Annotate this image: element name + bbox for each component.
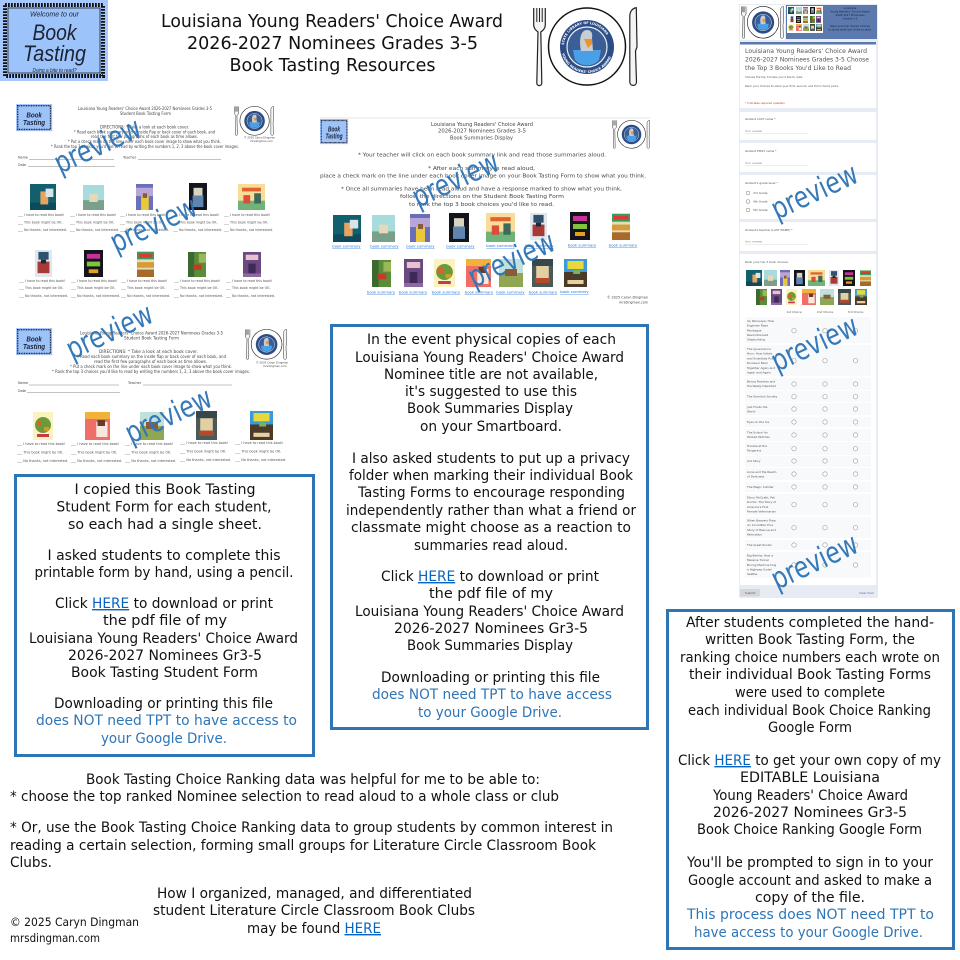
text box: summaries display instructions: Book Summaries Display: [407, 401, 573, 417]
icon: plate with fork, knife and award seal: STATE LIBRARY OF LOUISIANA: [562, 22, 608, 45]
submit button and clear form: [740, 589, 874, 596]
watermark: preview stamps: preview: [105, 190, 203, 260]
grid row labels: and Scientists Put a: [747, 356, 776, 360]
response lines row 1: ___ This book might be OK.: [172, 220, 218, 224]
text box: summaries display instructions: Louisiana Young Readers' Choice Award: [355, 350, 624, 366]
text box: google form instructions: After students completed the hand-: [686, 615, 934, 631]
logo: small book tasting sign: Book: [26, 334, 42, 343]
text box: summaries display instructions: Louisiana Young Readers' Choice Award: [355, 604, 624, 620]
logo: small book tasting sign: Tasting: [23, 118, 45, 127]
icon: plate: [245, 329, 287, 359]
watermark: preview stamps: preview: [120, 381, 218, 451]
logo: small book tasting sign: [320, 119, 348, 144]
text box: student form instructions: the pdf file of my: [103, 613, 227, 629]
text box: summaries display instructions: Click HERE to download or print: [381, 569, 599, 585]
watermark: preview stamps: preview: [49, 111, 147, 181]
grid row labels: Relocation: [747, 532, 762, 536]
grid row labels: Wicked Witches: [747, 435, 770, 439]
question: teacher: student's teacher (LAST NAME) *: [745, 228, 793, 232]
response lines row 2: [18, 279, 275, 298]
text block: ranking data uses: * Or, use the Book Tasting Choice Ranking data to group students by common interest in: [10, 820, 613, 836]
text box: summaries display instructions: Downloading or printing this file: [381, 670, 600, 686]
book covers: [33, 411, 273, 440]
directions text: Date: [18, 389, 26, 393]
response lines row 2: ___ No thanks, not interested.: [173, 294, 223, 298]
book covers row 1 with links: book summary: [370, 244, 399, 248]
copyright: [10, 915, 139, 945]
grid row labels: of Darkness: [747, 474, 765, 478]
grid radio buttons: [792, 328, 858, 567]
question: grade level: student's grade level *: [745, 181, 778, 185]
display instructions: Louisiana Young Readers' Choice Award: [431, 122, 533, 128]
text block: literature circle link: [153, 886, 475, 937]
directions text: * Put a check mark on the line under each book cover image to show what you think.: [68, 139, 221, 144]
panel: student book tasting form page 1 preview: [16, 104, 275, 298]
text box: google form instructions: 2026-2027 Nominees Gr3-5: [713, 805, 907, 821]
grid rows background: [745, 317, 871, 578]
display instructions: follow the directions on the Student Book Tasting Form: [400, 194, 564, 200]
directions text: DIRECTIONS: * Take a look at each book cover.: [100, 124, 189, 130]
book covers row 2 with links: book summary: [432, 290, 461, 294]
grid row labels: When Beavers Flew:: [747, 518, 776, 522]
book covers row 1 with links: book summary: [609, 242, 638, 248]
response lines: ___ This book might be OK.: [124, 450, 171, 454]
response lines: ___ I have to read this book!: [179, 441, 228, 445]
grid row labels: Montague: [747, 328, 762, 332]
text box: google form instructions: have access to your Google Drive.: [694, 925, 923, 941]
grid row labels: a Highway Under: [747, 568, 773, 572]
response lines row 1: ___ No thanks, not interested.: [119, 228, 169, 232]
response lines: ___ No thanks, not interested.: [16, 459, 68, 463]
book covers row 1 with links: [332, 212, 638, 248]
grid row labels: Up Periscope: How: [747, 319, 775, 323]
form header with plate and banner: Rank your top 3 book choices: [830, 24, 870, 28]
logo: Book Tasting sign: Book: [32, 20, 77, 45]
response lines row 2: ___ This book might be OK.: [120, 286, 166, 290]
grid row labels: Trouble at the: [746, 444, 767, 448]
directions text: * Rank the top 3 choices you'd like to read by writing the numbers 1, 2, 3 above the book cover images.: [52, 369, 250, 374]
book covers row 2: [35, 250, 261, 277]
text box: summaries display instructions: folder when marking their individual Book: [349, 468, 634, 484]
response lines row 1: ___ No thanks, not interested.: [69, 228, 119, 232]
form header with plate and banner: Young Readers' Choice Award: [830, 10, 870, 14]
logo: Book Tasting sign: Tasting: [23, 41, 87, 66]
directions text: mrsdingman.com: [250, 139, 273, 143]
display instructions: place a check mark on the line under each book cover image on your Book Tasting Form to show what you think.: [320, 174, 647, 180]
text box: google form instructions: were used to complete: [735, 685, 885, 701]
response lines: ___ I have to read this book!: [70, 442, 119, 446]
grid row labels: Seattle: [747, 572, 757, 576]
grid row labels: Eyes on the Ice: [747, 420, 769, 424]
copyright: © 2025 Caryn Dingman: [10, 915, 139, 929]
question: grade level: 4th Grade: [753, 200, 768, 204]
question: student last name: student LAST name *: [745, 117, 776, 121]
response lines row 1: ___ I have to read this book!: [223, 213, 270, 217]
response lines row 2: ___ This book might be OK.: [18, 286, 64, 290]
directions text: Louisiana Young Readers' Choice Award 2026-2027 Nominees Grades 3-5: [78, 106, 212, 111]
question: student last name: Your answer: [745, 129, 763, 133]
directions text: [18, 106, 275, 167]
response lines: ___ This book might be OK.: [234, 450, 281, 454]
book covers row 1: [30, 183, 265, 210]
display instructions: * Your teacher will click on each book summary link and read those summaries aloud.: [358, 152, 607, 158]
text box: google form instructions: This process does NOT need TPT to: [686, 907, 934, 923]
form header with plate and banner: Grades 3-5: [843, 16, 858, 20]
text box: summaries display instructions: classmate might choose as a reaction to: [351, 520, 631, 536]
text box: google form instructions: their individual Book Tasting Forms: [689, 667, 931, 683]
grid row labels: The Sherlock Society: [746, 394, 778, 398]
text box: google form instructions: Click HERE to get your own copy of my: [678, 753, 941, 769]
text box: summaries display instructions: independently rather than what a friend or: [346, 503, 636, 519]
form header with plate and banner: to show what you'd like to read.: [829, 28, 872, 32]
text block: literature circle link: How I organized, managed, and differentiated: [157, 886, 472, 902]
response lines row 1: ___ No thanks, not interested.: [172, 228, 222, 232]
grid row labels: Dinosaur Back: [747, 361, 768, 365]
form header with plate and banner: 2026-2027 Nominees: [836, 13, 865, 17]
book covers row 2 with links: book summary: [496, 290, 525, 294]
book covers row 1 with links: book summary: [525, 243, 554, 248]
text block: ranking data uses: reading a certain selection, forming small groups for Literature Circle Classroom Book: [10, 838, 597, 854]
text box: google form instructions: EDITABLE Louisiana: [740, 770, 880, 786]
logo: Book Tasting sign: Dying a bite to read?: [32, 68, 77, 74]
grid row labels: The Iguanodon's: [746, 347, 771, 351]
title: 2026-2027 Nominees Grades 3-5: [187, 33, 478, 54]
response lines: ___ This book might be OK.: [179, 450, 226, 454]
response lines row 2: ___ I have to read this book!: [225, 279, 272, 283]
icon: plate: [234, 106, 274, 135]
grid row labels: The Great Zoolini: [746, 543, 772, 547]
display instructions: * Once all summaries have been read aloud and have a response marked to show what you think,: [341, 186, 623, 192]
text box: google form instructions: written Book Tasting Form, the: [705, 632, 915, 648]
panel: google form preview: [739, 4, 878, 598]
directions text: Teacher: [122, 156, 137, 160]
submit button and clear form: Clear form: [859, 591, 874, 595]
icon: plate: [612, 120, 650, 149]
grid row labels: Shipbuilding: [747, 338, 765, 342]
response lines: ___ No thanks, not interested.: [124, 459, 176, 463]
form title card: [740, 42, 876, 108]
grid row labels: An Incredible True: [747, 523, 773, 527]
text box: student form instructions: Student Form for each student,: [56, 500, 272, 516]
response lines: ___ This book might be OK.: [16, 450, 63, 454]
text box: summaries display instructions: to your Google Drive.: [418, 705, 562, 721]
grid row labels: Boring Machine Dug: [747, 563, 776, 567]
response lines: ___ No thanks, not interested.: [70, 459, 122, 463]
grid row labels: Benny Ramirez and: [747, 380, 775, 384]
icon: plate with fork, knife and award seal: [533, 7, 638, 86]
grid column headers: 3rd Choice: [848, 310, 863, 314]
response lines row 1: ___ I have to read this book!: [119, 213, 166, 217]
text box: google form instructions: Google account and asked to make a: [688, 873, 932, 889]
text block: ranking data uses: Clubs.: [10, 855, 52, 871]
question: grade level: 3rd Grade: [753, 191, 768, 195]
response lines: [16, 441, 286, 463]
grid row labels: America's First: [747, 505, 769, 509]
form title card: Choose the top 3 books you'd like to read.: [745, 75, 803, 79]
panel: student book tasting form page 2 preview: [16, 328, 289, 463]
logo: small book tasting sign: Book: [26, 110, 42, 119]
directions text: Name: [18, 156, 28, 160]
book covers row 2 with links: [367, 259, 589, 294]
book covers row 1 with links: book summary: [486, 243, 515, 248]
title: [161, 11, 503, 76]
grid row labels: Anna and the Realm: [747, 470, 777, 474]
title: Book Tasting Resources: [230, 55, 436, 76]
text box: summaries display instructions: In the event physical copies of each: [367, 332, 616, 348]
text block: ranking data uses: Book Tasting Choice Ranking data was helpful for me to be able to:: [86, 772, 540, 788]
copyright small: © 2025 Caryn Dingman: [607, 296, 648, 300]
text box: student form instructions: does NOT need TPT to have access to: [36, 713, 297, 729]
form title card: Louisiana Young Readers' Choice Award: [745, 47, 867, 55]
grid row labels: World: [747, 410, 755, 414]
response lines: ___ I have to read this book!: [234, 441, 283, 445]
logo: Book Tasting sign: Welcome to our: [30, 12, 80, 18]
text box: summaries display instructions: 2026-2027 Nominees Gr3-5: [394, 621, 588, 637]
response lines: ___ I have to read this book!: [16, 442, 65, 446]
response lines row 1: ___ I have to read this book!: [17, 213, 64, 217]
icon: plate with fork, knife and award seal: YOUNG READERS' CHOICE AWARD: [562, 52, 611, 73]
text box: summaries display instructions: [332, 326, 648, 728]
book covers row 2 with links: book summary: [560, 289, 589, 294]
form title card: Rank your choices to show your first, second, and third choice picks.: [745, 84, 839, 88]
grid column headers: 1st Choice: [786, 310, 802, 314]
text box: summaries display instructions: summaries read aloud.: [414, 538, 568, 554]
question: student first name: [740, 143, 876, 172]
book covers row 1 with links: book summary: [332, 244, 361, 248]
copyright: mrsdingman.com: [10, 931, 100, 945]
text box: student form instructions: Click HERE to download or print: [55, 596, 273, 612]
text box: google form instructions: Young Readers' Choice Award: [712, 788, 908, 804]
directions text: * Rank the top 3 choices you'd like to read by writing the numbers 1, 2, 3 above the book cover images.: [51, 144, 239, 149]
response lines row 1: ___ No thanks, not interested.: [223, 228, 273, 232]
watermark: preview stamps: preview: [766, 157, 864, 227]
question: student last name: [740, 112, 876, 140]
text box: student form instructions: so each had a single sheet.: [68, 517, 262, 533]
response lines row 2: ___ This book might be OK.: [225, 286, 270, 290]
response lines row 2: ___ I have to read this book!: [120, 279, 167, 283]
directions text: Student Book Tasting Form: [120, 111, 171, 116]
directions text: read the first few paragraphs of each book as time allows.: [94, 359, 207, 364]
logo: small book tasting sign: [16, 328, 52, 355]
grid row labels: Together Again and: [746, 366, 775, 370]
question: teacher: Your answer: [745, 240, 763, 244]
text box: student form instructions: printable form by hand, using a pencil.: [34, 565, 294, 581]
grid row labels: The Magic Collider: [746, 485, 775, 489]
directions text: © 2025 Caryn Dingman: [244, 136, 275, 140]
watermark: preview stamps: preview: [766, 527, 864, 597]
response lines row 2: ___ I have to read this book!: [70, 279, 117, 283]
response lines row 1: ___ This book might be OK.: [17, 220, 62, 224]
response lines row 2: ___ No thanks, not interested.: [70, 294, 120, 298]
text box: summaries display instructions: the pdf file of my: [429, 586, 553, 602]
watermark: preview stamps: preview: [766, 309, 864, 379]
directions text: Teacher: [127, 381, 142, 385]
grid row labels: Elinor McGrath, Pet: [747, 496, 776, 500]
response lines row 2: ___ This book might be OK.: [173, 286, 218, 290]
submit button and clear form: Submit: [745, 591, 756, 595]
text block: ranking data uses: * choose the top ranked Nominee selection to read aloud to a whole class or club: [10, 789, 559, 805]
question: student first name: Your answer: [745, 161, 763, 165]
grid row labels: Just Foods the: [746, 405, 768, 409]
logo: small book tasting sign: [16, 104, 52, 131]
text box: student form instructions: Downloading or printing this file: [54, 696, 273, 712]
grid column headers: [786, 310, 863, 314]
book covers row 2 with links: book summary: [399, 290, 428, 294]
grid row labels: [746, 319, 778, 576]
text box: student form instructions: [16, 476, 314, 756]
text box: student form instructions: Louisiana Young Readers' Choice Award: [29, 631, 298, 647]
watermark: preview stamps: [49, 111, 864, 597]
form title card: 2026-2027 Nominees Grades 3-5 Choose: [745, 56, 869, 64]
directions text: [18, 330, 289, 393]
directions text: © 2025 Caryn Dingman: [256, 360, 289, 364]
logo: small book tasting sign: Tasting: [23, 342, 45, 351]
form title card: the Top 3 Books You'd Like to Read: [745, 64, 851, 72]
copyright small: mrsdingman.com: [619, 300, 648, 304]
response lines: ___ This book might be OK.: [70, 450, 117, 454]
logo: Book Tasting sign: [0, 0, 108, 81]
response lines row 2: ___ I have to read this book!: [173, 279, 220, 283]
book covers row 2 with links: book summary: [367, 290, 396, 294]
response lines row 2: ___ No thanks, not interested.: [120, 294, 170, 298]
directions text: * Put a check mark on the line under each book cover image to show what you think.: [70, 364, 232, 369]
text box: google form instructions: ranking choice numbers each wrote on: [680, 650, 940, 666]
directions text: Date: [18, 163, 26, 167]
grid row labels: Revolutionized: [747, 333, 768, 337]
response lines row 2: ___ I have to read this book!: [18, 279, 65, 283]
text box: student form instructions: Book Tasting Student Form: [71, 665, 258, 681]
response lines row 1: ___ No thanks, not interested.: [17, 228, 67, 232]
response lines row 2: ___ No thanks, not interested.: [18, 294, 68, 298]
title: Louisiana Young Readers' Choice Award: [161, 11, 503, 32]
text box: summaries display instructions: it's suggested to use this: [405, 384, 577, 400]
display instructions: [320, 122, 647, 208]
directions text: DIRECTIONS: * Take a look at each book cover.: [99, 349, 198, 354]
text box: google form instructions: [668, 610, 954, 948]
form title card: * Indicates required question: [745, 101, 785, 105]
grid row labels: Horn: How Artists: [747, 352, 773, 356]
book covers row 2 with links: book summary: [465, 290, 494, 294]
display instructions: 2026-2027 Nominees Grades 3-5: [438, 128, 526, 134]
grid row labels: Again and Again: [747, 370, 771, 374]
text box: google form instructions: Google Form: [768, 720, 852, 736]
grid row labels: Female Veterinarian: [747, 510, 776, 514]
response lines row 1: ___ This book might be OK.: [69, 220, 114, 224]
text box: student form instructions: I asked students to complete this: [48, 548, 280, 564]
grid row labels: Story of Rescue and: [747, 528, 776, 532]
directions text: mrsdingman.com: [263, 364, 287, 368]
grid row labels: The School for: [746, 430, 769, 434]
logo: small book tasting sign: Book: [328, 126, 340, 134]
response lines row 1: [17, 213, 273, 232]
panel: book summaries display preview: [320, 118, 650, 304]
text box: summaries display instructions: Book Summaries Display: [407, 638, 573, 654]
directions text: read the first few paragraphs of each book as time allows.: [91, 134, 198, 139]
book covers: [746, 270, 871, 305]
text box: student form instructions: I copied this Book Tasting: [74, 482, 256, 498]
question: teacher: [740, 222, 876, 251]
text box: student form instructions: your Google Drive.: [101, 731, 227, 747]
response lines: ___ No thanks, not interested.: [234, 458, 286, 462]
form header with plate and banner: [740, 5, 877, 40]
grid row labels: Engineer Raye: [747, 324, 768, 328]
watermark: preview stamps: preview: [61, 297, 159, 367]
response lines row 1: ___ I have to read this book!: [69, 213, 116, 217]
grid row labels: Tangerine: [746, 448, 761, 452]
display instructions: * After each summary is read aloud,: [428, 166, 536, 172]
directions text: * Read each book summary on the inside flap or back cover of each book, and: [77, 354, 226, 359]
directions text: * Read each book summary on the inside flap or back cover of each book, and: [74, 130, 215, 134]
question: student first name: student FIRST name *: [745, 149, 777, 153]
response lines row 2: ___ This book might be OK.: [70, 286, 116, 290]
text box: summaries display instructions: Nominee title are not available,: [384, 367, 598, 383]
response lines: ___ I have to read this book!: [124, 442, 173, 446]
copyright small: [607, 296, 648, 304]
response lines: ___ No thanks, not interested.: [179, 458, 231, 462]
display instructions: Book Summaries Display: [450, 136, 513, 142]
response lines row 1: ___ This book might be OK.: [119, 220, 164, 224]
question: ranking grid: [740, 254, 876, 585]
response lines row 2: ___ No thanks, not interested.: [225, 294, 275, 298]
question: grade level: 5th Grade: [753, 208, 768, 212]
response lines row 1: ___ This book might be OK.: [223, 220, 268, 224]
book covers row 2 with links: book summary: [529, 290, 558, 294]
text box: google form instructions: copy of the file.: [755, 890, 865, 906]
question: grade level: [740, 175, 876, 219]
text block: ranking data uses: [10, 772, 613, 871]
grid row labels: Doctor: The Story of: [747, 500, 777, 504]
text box: summaries display instructions: does NOT need TPT to have access: [372, 687, 612, 703]
question: ranking grid: Rank your top 3 book choices:: [745, 260, 789, 264]
book covers row 1 with links: book summary: [446, 244, 475, 248]
text block: literature circle link: student Literature Circle Classroom Book Clubs: [153, 903, 475, 919]
text box: student form instructions: 2026-2027 Nominees Gr3-5: [68, 648, 262, 664]
grid column headers: 2nd Choice: [817, 310, 833, 314]
directions text: Name: [18, 381, 28, 385]
grid row labels: Big Bertha: How a: [747, 554, 773, 558]
book covers row 1 with links: book summary: [406, 244, 435, 248]
text box: summaries display instructions: Tasting Forms to encourage responding: [357, 485, 625, 501]
text box: google form instructions: You'll be prompted to sign in to your: [686, 855, 933, 871]
book covers row 1 with links: book summary: [568, 242, 597, 248]
form header with plate and banner: Louisiana: [844, 6, 857, 10]
text box: summaries display instructions: on your Smartboard.: [420, 419, 562, 435]
watermark: preview stamps: preview: [463, 225, 561, 295]
logo: small book tasting sign: Tasting: [325, 133, 343, 141]
directions text: Louisiana Young Readers' Choice Award 2026-2027 Nominees Grades 3-5: [80, 330, 223, 336]
text box: google form instructions: each individual Book Choice Ranking: [688, 703, 931, 719]
watermark: preview stamps: preview: [407, 145, 505, 215]
grid row labels: the Newly Departed: [747, 384, 776, 388]
display instructions: to rank the top 3 book choices you'd like to read.: [409, 202, 555, 208]
text box: summaries display instructions: I also asked students to put up a privacy: [352, 451, 630, 467]
text block: literature circle link: may be found HERE: [247, 921, 381, 937]
text box: google form instructions: Book Choice Ranking Google Form: [697, 822, 922, 838]
grid row labels: Massive Tunnel: [747, 558, 769, 562]
grid row labels: Ant Story: [747, 459, 761, 463]
response lines row 1: ___ I have to read this book!: [172, 213, 219, 217]
directions text: Student Book Tasting Form: [124, 336, 179, 340]
